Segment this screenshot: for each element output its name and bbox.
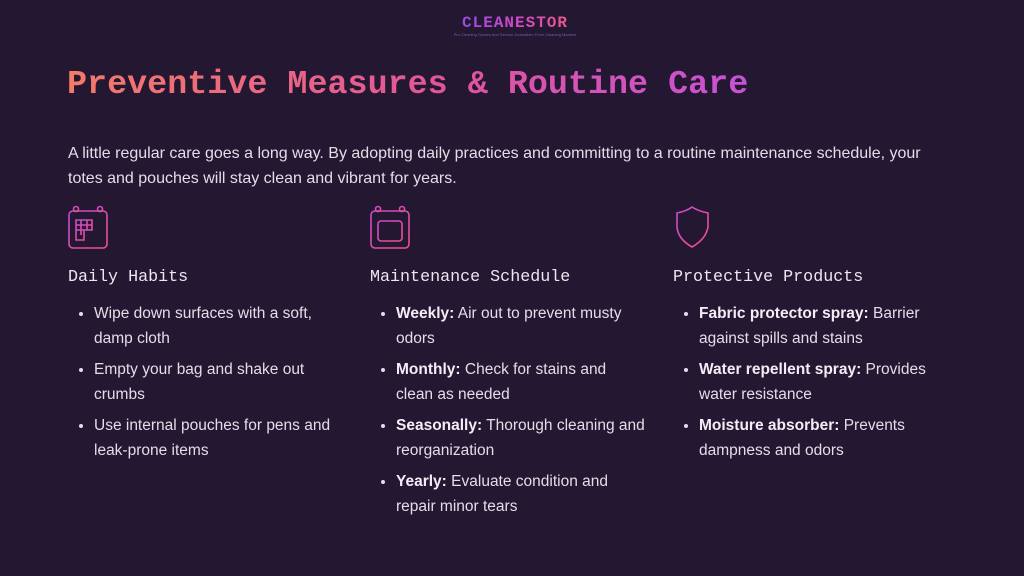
list: Seasonally: Thorough cleaning and xyxy=(396,417,645,434)
intro text: A little regular care goes a long way. By adopting daily practices and committing to a routine maintenance schedule, your totes and pouches will stay clean and vibrant for years. xyxy=(68,145,921,187)
list: Moisture absorber: Prevents dampness and odors xyxy=(699,417,905,459)
list: Empty your bag and shake out crumbs xyxy=(94,361,304,403)
list xyxy=(381,305,645,515)
heading: Protective Products xyxy=(673,268,863,287)
list: Monthly: Check for stains and clean as needed xyxy=(396,361,606,403)
list: Water repellent spray: Provides water resistance xyxy=(699,361,926,403)
list: reorganization xyxy=(396,442,494,459)
logo xyxy=(454,14,576,37)
heading: Maintenance Schedule xyxy=(370,268,570,287)
icon: shield xyxy=(676,206,709,248)
panel: protective products xyxy=(673,206,926,459)
list xyxy=(684,305,926,459)
list: Yearly: Evaluate condition and repair minor tears xyxy=(396,473,608,515)
logo: CLEANESTOR xyxy=(462,14,568,32)
icon: calendar xyxy=(370,206,410,249)
logo: Pro Cleaning Guides And Service Journalism From Cleaning Masters xyxy=(454,32,576,37)
title: Preventive Measures & Routine Care xyxy=(67,66,748,104)
heading: Daily Habits xyxy=(68,268,188,287)
list xyxy=(79,305,330,459)
panel: daily habits xyxy=(68,206,330,459)
icon: calendar grid xyxy=(68,206,108,249)
panel: maintenance schedule xyxy=(370,206,645,515)
list: Weekly: Air out to prevent musty odors xyxy=(396,305,621,347)
list: Use internal pouches for pens and leak-prone items xyxy=(94,417,330,459)
list: Wipe down surfaces with a soft, damp cloth xyxy=(94,305,312,347)
list: Fabric protector spray: Barrier against spills and stains xyxy=(699,305,920,347)
